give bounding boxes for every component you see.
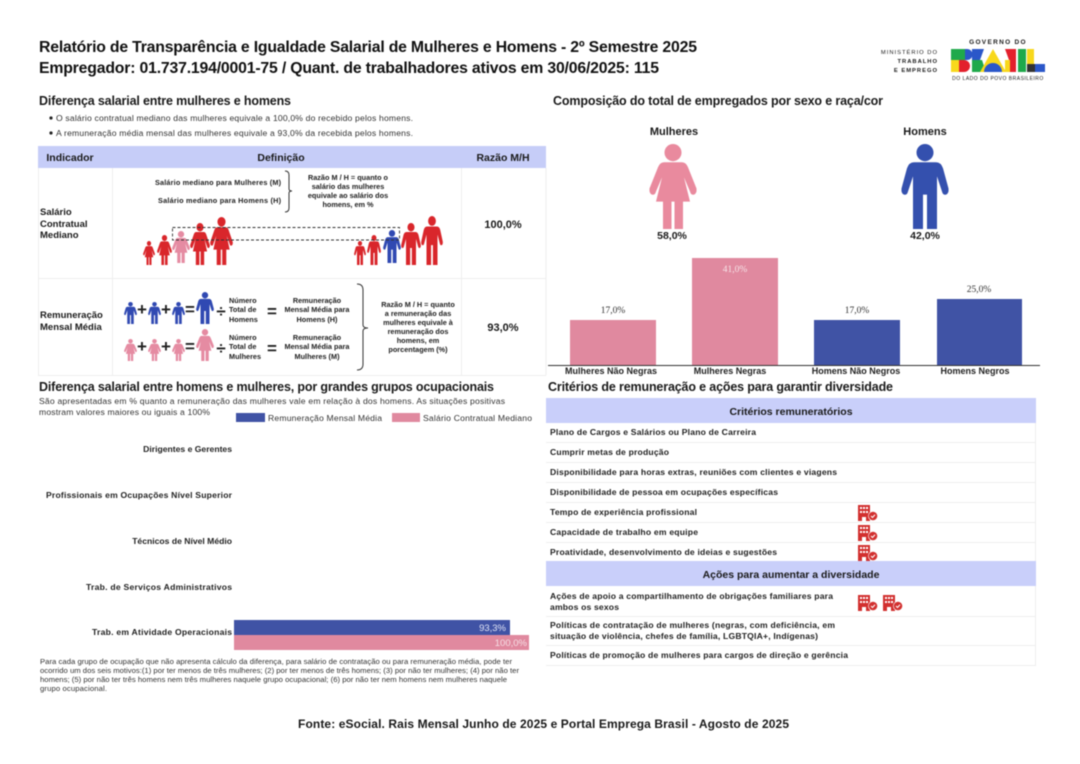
formula: mulheres: + bbox=[137, 337, 147, 356]
logo: ministério e governo do Brasil: GOVERNO DO bbox=[969, 39, 1027, 46]
formula: homens: + bbox=[137, 300, 147, 319]
panel: ações para aumentar a diversidade: Políticas de promoção de mulheres para cargos de direção e gerência bbox=[550, 650, 848, 660]
chart: grupos ocupacionais: Dirigentes e Gerentes bbox=[143, 444, 232, 454]
bracket and ratio definition: porcentagem (%) bbox=[388, 345, 448, 354]
formula: homens bbox=[124, 292, 350, 324]
bullet text bbox=[49, 113, 413, 138]
formula: homens: ÷ bbox=[216, 302, 226, 321]
formula: homens: Número bbox=[229, 296, 257, 305]
formula: mulheres: Mulheres (M) bbox=[294, 352, 340, 361]
description: grupos ocupacionais: mostram valores maiores ou iguais a 100% bbox=[39, 407, 210, 417]
legend: Salário Contratual Mediano bbox=[423, 413, 532, 423]
panel: ações para aumentar a diversidade: Políticas de contratação de mulheres (negras, com deficiência, em bbox=[550, 620, 835, 630]
definition text: salário mediano bbox=[155, 171, 389, 212]
row label: salário contratual mediano: Salário bbox=[40, 207, 72, 218]
pictogram: mulheres: 58,0% bbox=[657, 230, 688, 242]
formula: mulheres: = bbox=[185, 337, 195, 356]
definition text: salário mediano: Salário mediano para Mulheres (M) bbox=[155, 178, 282, 187]
bracket and ratio definition bbox=[357, 284, 455, 370]
bar chart: composição: 25,0% bbox=[967, 285, 991, 295]
formula: homens: Total de bbox=[229, 305, 256, 314]
formula: homens: Homens bbox=[229, 315, 258, 324]
logo: ministério e governo do Brasil: E EMPREGO bbox=[894, 68, 938, 74]
description: grupos ocupacionais: São apresentadas em % quanto a remuneração das mulheres vale em relação à dos homens. As situações positivas bbox=[39, 396, 505, 406]
panel: critérios remuneratórios: Critérios remuneratórios bbox=[729, 406, 853, 418]
chart: grupos ocupacionais: 100,0% bbox=[495, 638, 528, 649]
logo: ministério e governo do Brasil: MINISTÉRIO DO bbox=[881, 49, 938, 56]
heading: critérios: Critérios de remuneração e ações para garantir diversidade bbox=[548, 380, 893, 394]
footnote: ocorrido um dos seis motivos:(1) por ter menos de três mulheres; (2) por ter menos de três homens; (3) por não ter mulheres; (4) por não ter bbox=[40, 666, 519, 675]
formula: mulheres: Mulheres bbox=[229, 352, 261, 361]
bar chart: composição: 41,0% bbox=[723, 265, 747, 275]
row label: remuneração mensal média bbox=[40, 310, 103, 333]
definition text: salário mediano: salário das mulheres bbox=[312, 182, 384, 191]
pictogram: mulheres bbox=[649, 126, 698, 242]
footnote: Para cada grupo de ocupação que não apresenta cálculo da diferença, para salário de contratação ou para remuneração média, pode ter bbox=[40, 657, 512, 666]
logo: ministério e governo do Brasil: TRABALHO bbox=[897, 59, 938, 65]
bracket and ratio definition: Razão M / H = quanto bbox=[381, 300, 455, 309]
row label: salário contratual mediano: Mediano bbox=[40, 230, 79, 241]
panel: ações para aumentar a diversidade bbox=[546, 561, 1036, 666]
icon: empresa com selo bbox=[858, 545, 878, 561]
pictogram: homens bbox=[901, 126, 949, 242]
panel: ações para aumentar a diversidade: situação de violência, chefes de família, LGBTQIA+, Indígenas) bbox=[550, 631, 818, 641]
value: 100,0%: 100,0% bbox=[484, 219, 522, 231]
bar chart: composição: 17,0% bbox=[601, 306, 625, 316]
panel: critérios remuneratórios: Disponibilidade para horas extras, reuniões com clientes e viagens bbox=[550, 467, 837, 477]
bracket and ratio definition: mulheres equivale à bbox=[383, 318, 454, 327]
panel: critérios remuneratórios bbox=[546, 398, 1036, 561]
legend bbox=[236, 413, 532, 423]
bar chart: composição: Mulheres Não Negras bbox=[565, 366, 657, 376]
panel: ações para aumentar a diversidade: ambos os sexos bbox=[550, 602, 619, 612]
chart: grupos ocupacionais bbox=[46, 444, 529, 650]
footnote: homens; (5) por não ter três homens nem três mulheres naquele grupo ocupacional; (6) por não ter nem homens nem mulheres naquele bbox=[40, 675, 507, 684]
formula: mulheres: = bbox=[267, 339, 277, 358]
figures: mediana bbox=[143, 216, 443, 265]
chart: grupos ocupacionais: 93,3% bbox=[479, 623, 507, 634]
formula: mulheres: Remuneração bbox=[293, 333, 342, 342]
formula: homens: Mensal Média para bbox=[285, 305, 350, 314]
title bbox=[39, 39, 697, 77]
icon: empresa com selo bbox=[883, 595, 903, 611]
bracket and ratio definition: remuneração dos bbox=[388, 327, 448, 336]
formula: mulheres: Mensal Média para bbox=[285, 342, 350, 351]
panel: critérios remuneratórios: Disponibilidade de pessoa em ocupações específicas bbox=[550, 487, 778, 497]
panel: tabela de indicadores: Definição bbox=[257, 152, 305, 164]
bar chart: composição: Homens Negros bbox=[940, 366, 1010, 376]
title: Relatório de Transparência e Igualdade Salarial de Mulheres e Homens - 2º Semestre 2025 bbox=[39, 39, 697, 56]
formula: mulheres: + bbox=[161, 337, 171, 356]
bracket and ratio definition: a remuneração das bbox=[385, 309, 451, 318]
bar chart: composição bbox=[548, 258, 1040, 376]
formula: mulheres: ÷ bbox=[216, 339, 226, 358]
formula: homens: Remuneração bbox=[293, 296, 342, 305]
footnote: grupo ocupacional. bbox=[40, 684, 107, 693]
icon: empresa com selo bbox=[858, 505, 878, 521]
panel: tabela de indicadores bbox=[38, 146, 546, 376]
row label: remuneração mensal média: Remuneração bbox=[40, 310, 103, 321]
definition text: salário mediano: equivale ao salário dos bbox=[308, 191, 388, 200]
legend: Remuneração Mensal Média bbox=[268, 413, 382, 423]
chart: grupos ocupacionais: Trab. em Atividade Operacionais bbox=[92, 627, 232, 637]
panel: critérios remuneratórios: Tempo de experiência profissional bbox=[550, 507, 697, 517]
logo: ministério e governo do Brasil: DO LADO DO POVO BRASILEIRO bbox=[952, 76, 1044, 82]
logo: ministério e governo do Brasil bbox=[881, 39, 1045, 82]
bracket and ratio definition: homens, em bbox=[397, 336, 440, 345]
heading: grupos ocupacionais: Diferença salarial entre homens e mulheres, por grandes grupos ocupacionais bbox=[39, 380, 494, 394]
formula: mulheres: Total de bbox=[229, 342, 256, 351]
formula: homens: + bbox=[161, 300, 171, 319]
value: 93,0%: 93,0% bbox=[487, 322, 519, 334]
panel: critérios remuneratórios: Capacidade de trabalho em equipe bbox=[550, 527, 698, 537]
row label: salário contratual mediano: Contratual bbox=[40, 219, 88, 230]
pictogram: mulheres: Mulheres bbox=[650, 126, 698, 138]
row label: salário contratual mediano bbox=[40, 207, 88, 241]
panel: critérios remuneratórios: Cumprir metas de produção bbox=[550, 447, 669, 457]
formula: homens: Homens (H) bbox=[297, 315, 338, 324]
bar chart: composição: Mulheres Negras bbox=[694, 366, 766, 376]
heading: diferença salarial: Diferença salarial entre mulheres e homens bbox=[39, 94, 291, 108]
heading: composição: Composição do total de empregados por sexo e raça/cor bbox=[553, 94, 883, 108]
panel: ações para aumentar a diversidade: Ações para aumentar a diversidade bbox=[703, 569, 880, 581]
source footer: Fonte: eSocial. Rais Mensal Junho de 2025 e Portal Emprega Brasil - Agosto de 2025 bbox=[298, 717, 789, 731]
definition text: salário mediano: Razão M / H = quanto o bbox=[308, 173, 389, 182]
chart: grupos ocupacionais: Profissionais em Ocupações Nível Superior bbox=[46, 490, 233, 500]
formula: mulheres: Número bbox=[229, 333, 257, 342]
description: grupos ocupacionais bbox=[39, 396, 505, 417]
definition text: salário mediano: Salário mediano para Homens (H) bbox=[158, 196, 282, 205]
icon: empresa com selo bbox=[858, 525, 878, 541]
panel: critérios remuneratórios: Plano de Cargos e Salários ou Plano de Carreira bbox=[550, 427, 756, 437]
icon: empresa com selo bbox=[858, 595, 878, 611]
pictogram: homens: 42,0% bbox=[910, 230, 941, 242]
formula: homens: = bbox=[267, 302, 277, 321]
panel: tabela de indicadores: Indicador bbox=[46, 152, 94, 164]
bullet text: O salário contratual mediano das mulheres equivale a 100,0% do recebido pelos homens. bbox=[56, 113, 413, 123]
chart: grupos ocupacionais: Trab. de Serviços Administrativos bbox=[86, 582, 232, 592]
chart: grupos ocupacionais: Técnicos de Nível Médio bbox=[132, 536, 232, 546]
formula: mulheres bbox=[124, 329, 350, 361]
panel: ações para aumentar a diversidade: Ações de apoio a compartilhamento de obrigações familiares para bbox=[550, 591, 833, 601]
panel: tabela de indicadores: Razão M/H bbox=[476, 152, 530, 164]
title: Empregador: 01.737.194/0001-75 / Quant. de trabalhadores ativos em 30/06/2025: 115 bbox=[39, 60, 659, 77]
panel: critérios remuneratórios: Proatividade, desenvolvimento de ideias e sugestões bbox=[550, 547, 777, 557]
pictogram: homens: Homens bbox=[903, 126, 947, 138]
formula: homens: = bbox=[185, 300, 195, 319]
bar chart: composição: Homens Não Negros bbox=[812, 366, 900, 376]
row label: remuneração mensal média: Mensal Média bbox=[40, 322, 102, 333]
bullet text: A remuneração média mensal das mulheres equivale a 93,0% da recebida pelos homens. bbox=[56, 128, 413, 138]
definition text: salário mediano: homens, em % bbox=[322, 200, 374, 209]
footnote bbox=[40, 657, 519, 693]
bar chart: composição: 17,0% bbox=[845, 306, 869, 316]
